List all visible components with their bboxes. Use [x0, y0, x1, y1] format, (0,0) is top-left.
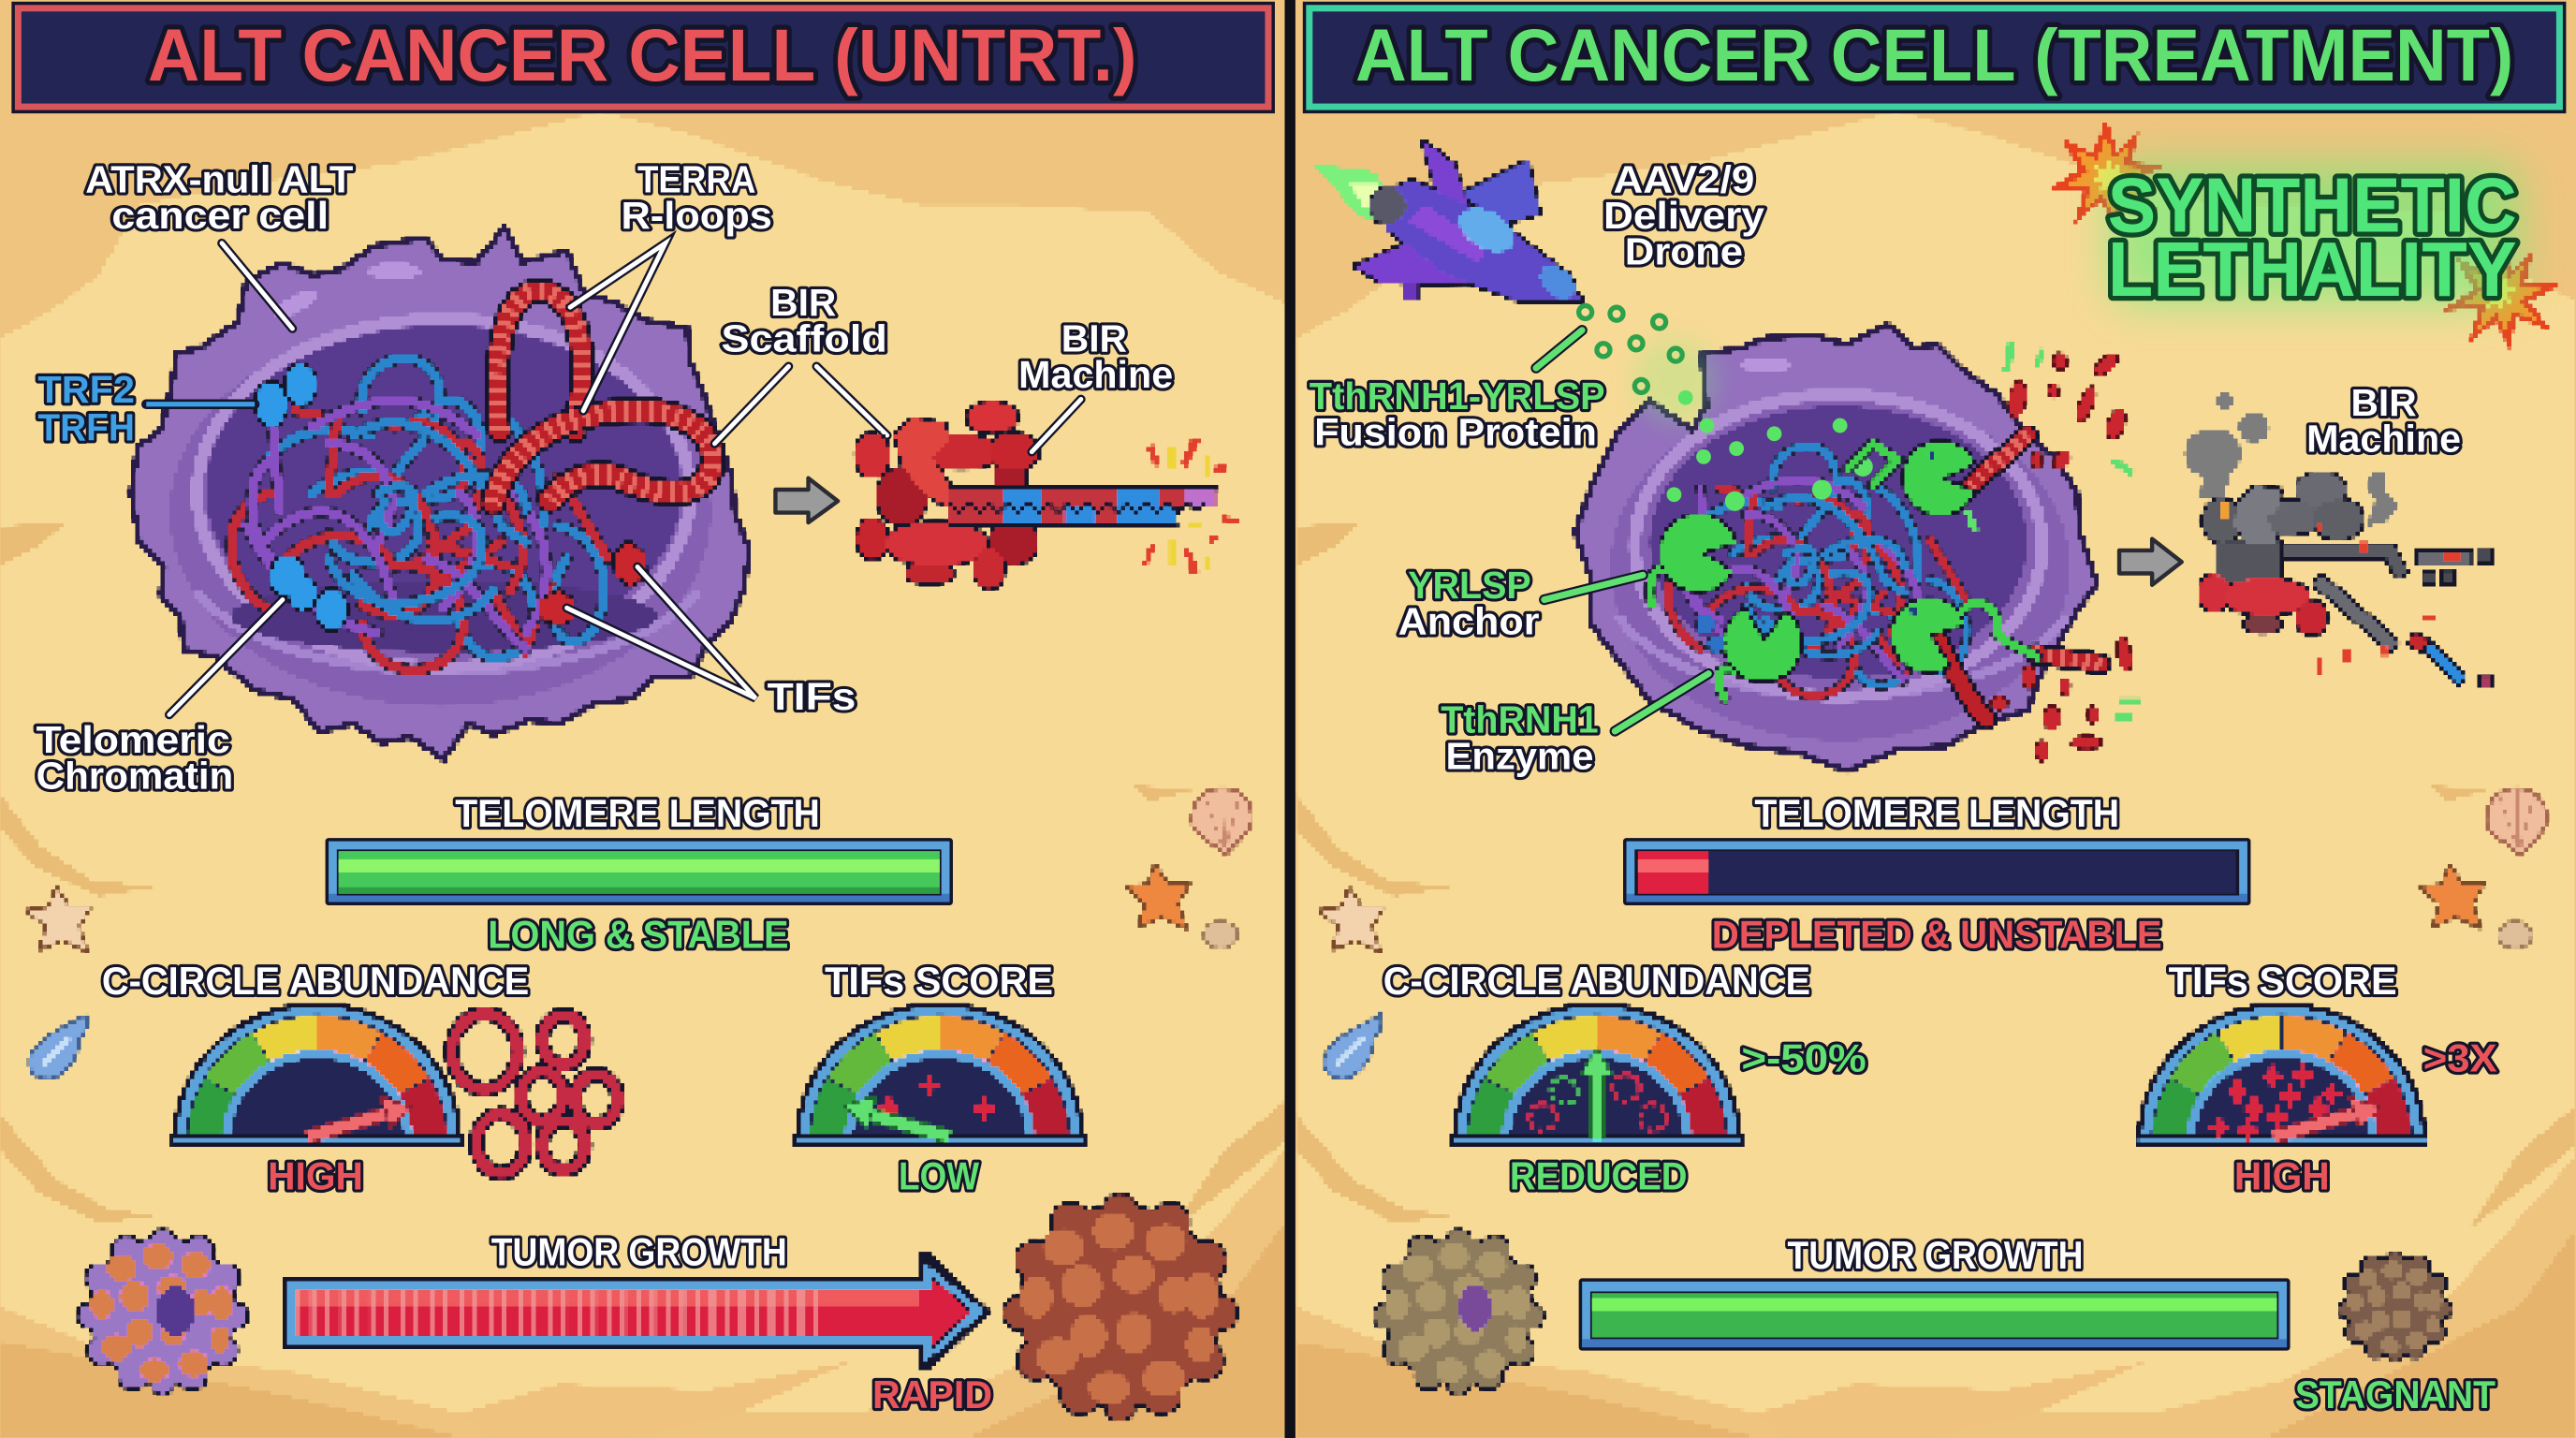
label: TIFs [567, 566, 856, 718]
arrow chart: rapid tumor growth [283, 1254, 990, 1371]
label: Telomeric Chromatin: Telomeric [37, 718, 230, 761]
label: TthRNH1-YRLSP fusion protein: Fusion Protein [1314, 411, 1597, 454]
label: TthRNH1 enzyme: Enzyme [1445, 734, 1593, 777]
label: BIR Machine: Machine [1018, 353, 1173, 396]
status: low: LOW [899, 1154, 979, 1198]
label: BIR Scaffold [714, 281, 887, 444]
label: TthRNH1-YRLSP fusion protein [1310, 330, 1605, 454]
chart: degraded telomeric DNA tangle [1668, 447, 1969, 696]
bar chart: telomere length long [326, 838, 953, 905]
status: rapid: RAPID [872, 1372, 992, 1416]
illustration: ruptured ALT cancer cell [1575, 325, 2096, 770]
icon: AAV2/9 delivery drone [1314, 141, 1582, 305]
callout: synthetic lethality: LETHALITY [2108, 227, 2517, 313]
icon: telomere-bound blue proteins [256, 365, 346, 629]
icon: large brown tumor [1004, 1196, 1237, 1419]
heading: TIFs score: TIFs SCORE [825, 959, 1053, 1003]
label: TERRA R-loops [570, 157, 772, 411]
label: TERRA R-loops: R-loops [621, 194, 772, 237]
icon: BIR machine [856, 403, 1218, 588]
icon: sparks at BIR machine [1144, 440, 1240, 574]
label: BIR machine destroyed: Machine [2306, 418, 2461, 461]
gauge: C-circle abundance high [172, 1003, 461, 1145]
label: YRLSP anchor: YRLSP [1408, 564, 1531, 607]
callout: synthetic lethality: SYNTHETIC [2108, 162, 2517, 248]
icon: C-circle rings [452, 1014, 618, 1173]
heading: C-circle abundance treated: C-CIRCLE ABUNDANCE [1383, 959, 1810, 1003]
label: ATRX-null ALT cancer cell: ATRX-null ALT [85, 157, 354, 200]
panel: untreated ALT cancer cell [11, 2, 1275, 1419]
panel: treated ALT cancer cell [1303, 2, 2566, 1416]
icon: enzyme ropes being cut [1937, 435, 2101, 720]
gauge: C-circle abundance reduced [1453, 1003, 1741, 1145]
label: TRF2 TRFH: TRF2 [37, 368, 135, 411]
heading: telomere length treated: TELOMERE LENGTH [1754, 791, 2119, 835]
icon: khaki treated tumor [1375, 1231, 1543, 1393]
label: YRLSP anchor: Anchor [1398, 599, 1540, 642]
heading: tumor growth: TUMOR GROWTH [491, 1229, 787, 1273]
label: ATRX-null ALT cancer cell: cancer cell [111, 194, 329, 237]
label: BIR Scaffold: Scaffold [722, 317, 887, 360]
label: Telomeric Chromatin [37, 600, 283, 797]
label: ATRX-null ALT cancer cell [85, 157, 354, 329]
heading: C-circle abundance: C-CIRCLE ABUNDANCE [102, 959, 529, 1003]
label: AAV2/9 delivery drone: Delivery [1603, 194, 1765, 237]
TERRA R-loop ropes [493, 291, 712, 503]
arrow: to BIR machine [775, 478, 838, 522]
label: YRLSP anchor [1398, 564, 1643, 642]
label: BIR Scaffold: BIR [770, 281, 836, 324]
label: TIFs: TIFs [768, 675, 856, 718]
status: high: HIGH [268, 1154, 363, 1198]
annotation: reduced by over 50 percent: >-50% [1741, 1035, 1866, 1079]
label: TERRA R-loops: TERRA [637, 157, 755, 200]
label: AAV2/9 delivery drone [1603, 157, 1765, 273]
label: TthRNH1 enzyme: TthRNH1 [1441, 698, 1599, 741]
icon: small stagnant tumor [2340, 1253, 2451, 1360]
chart: tangled telomeric DNA [231, 359, 607, 669]
arrow: to destroyed BIR machine [2119, 539, 2182, 585]
label: TRF2 TRFH: TRFH [37, 405, 135, 448]
heading: tumor growth treated: TUMOR GROWTH [1788, 1233, 2083, 1277]
icon: TIF damage foci [540, 542, 646, 624]
title: untreated header [11, 2, 1275, 113]
icon: cell debris fragments [1965, 342, 2139, 761]
label: AAV2/9 delivery drone: Drone [1625, 230, 1743, 273]
label: BIR machine destroyed [2306, 381, 2461, 461]
label: TthRNH1-YRLSP fusion protein: TthRNH1-YRLSP [1310, 374, 1605, 418]
gauge: TIFs score high [2137, 1003, 2426, 1145]
status: high treated: HIGH [2234, 1154, 2330, 1198]
bar chart: stagnant tumor growth [1579, 1278, 2291, 1351]
status: reduced: REDUCED [1510, 1154, 1687, 1198]
icon: smoke [2185, 393, 2397, 526]
icon: destroyed BIR machine [2200, 473, 2491, 687]
illustration: ATRX-null ALT cancer cell [131, 228, 749, 759]
label: BIR Machine: BIR [1061, 317, 1127, 360]
icon: fusion protein particles [1579, 305, 1873, 511]
icon: beach decoration left panel [26, 788, 1251, 1078]
icon: beach decoration right panel [1319, 788, 2546, 1078]
gauge: TIFs score low [795, 1003, 1084, 1145]
label: BIR machine destroyed: BIR [2351, 381, 2417, 424]
bar chart: telomere length depleted [1623, 838, 2250, 905]
icon: TthRNH1 enzymes with YRLSP anchors [1650, 442, 2037, 698]
annotation: more than 3X: >3X [2423, 1035, 2497, 1079]
callout: synthetic lethality [2049, 120, 2559, 350]
status: depleted and unstable: DEPLETED & UNSTABLE [1712, 913, 2162, 957]
label: AAV2/9 delivery drone: AAV2/9 [1613, 157, 1754, 200]
heading: telomere length: TELOMERE LENGTH [455, 791, 820, 835]
label: TRF2 TRFH [37, 368, 255, 448]
label: TthRNH1 enzyme [1441, 674, 1708, 777]
status: long and stable: LONG & STABLE [488, 913, 788, 957]
status: stagnant: STAGNANT [2295, 1372, 2496, 1416]
heading: TIFs score treated: TIFs SCORE [2169, 959, 2397, 1003]
label: Telomeric Chromatin: Chromatin [37, 754, 233, 797]
label: BIR Machine [1018, 317, 1173, 452]
title: untreated header: ALT CANCER CELL (UNTRT.) [148, 14, 1137, 96]
title: treatment header: ALT CANCER CELL (TREATMENT) [1355, 14, 2513, 96]
icon: small purple tumor [79, 1231, 246, 1393]
